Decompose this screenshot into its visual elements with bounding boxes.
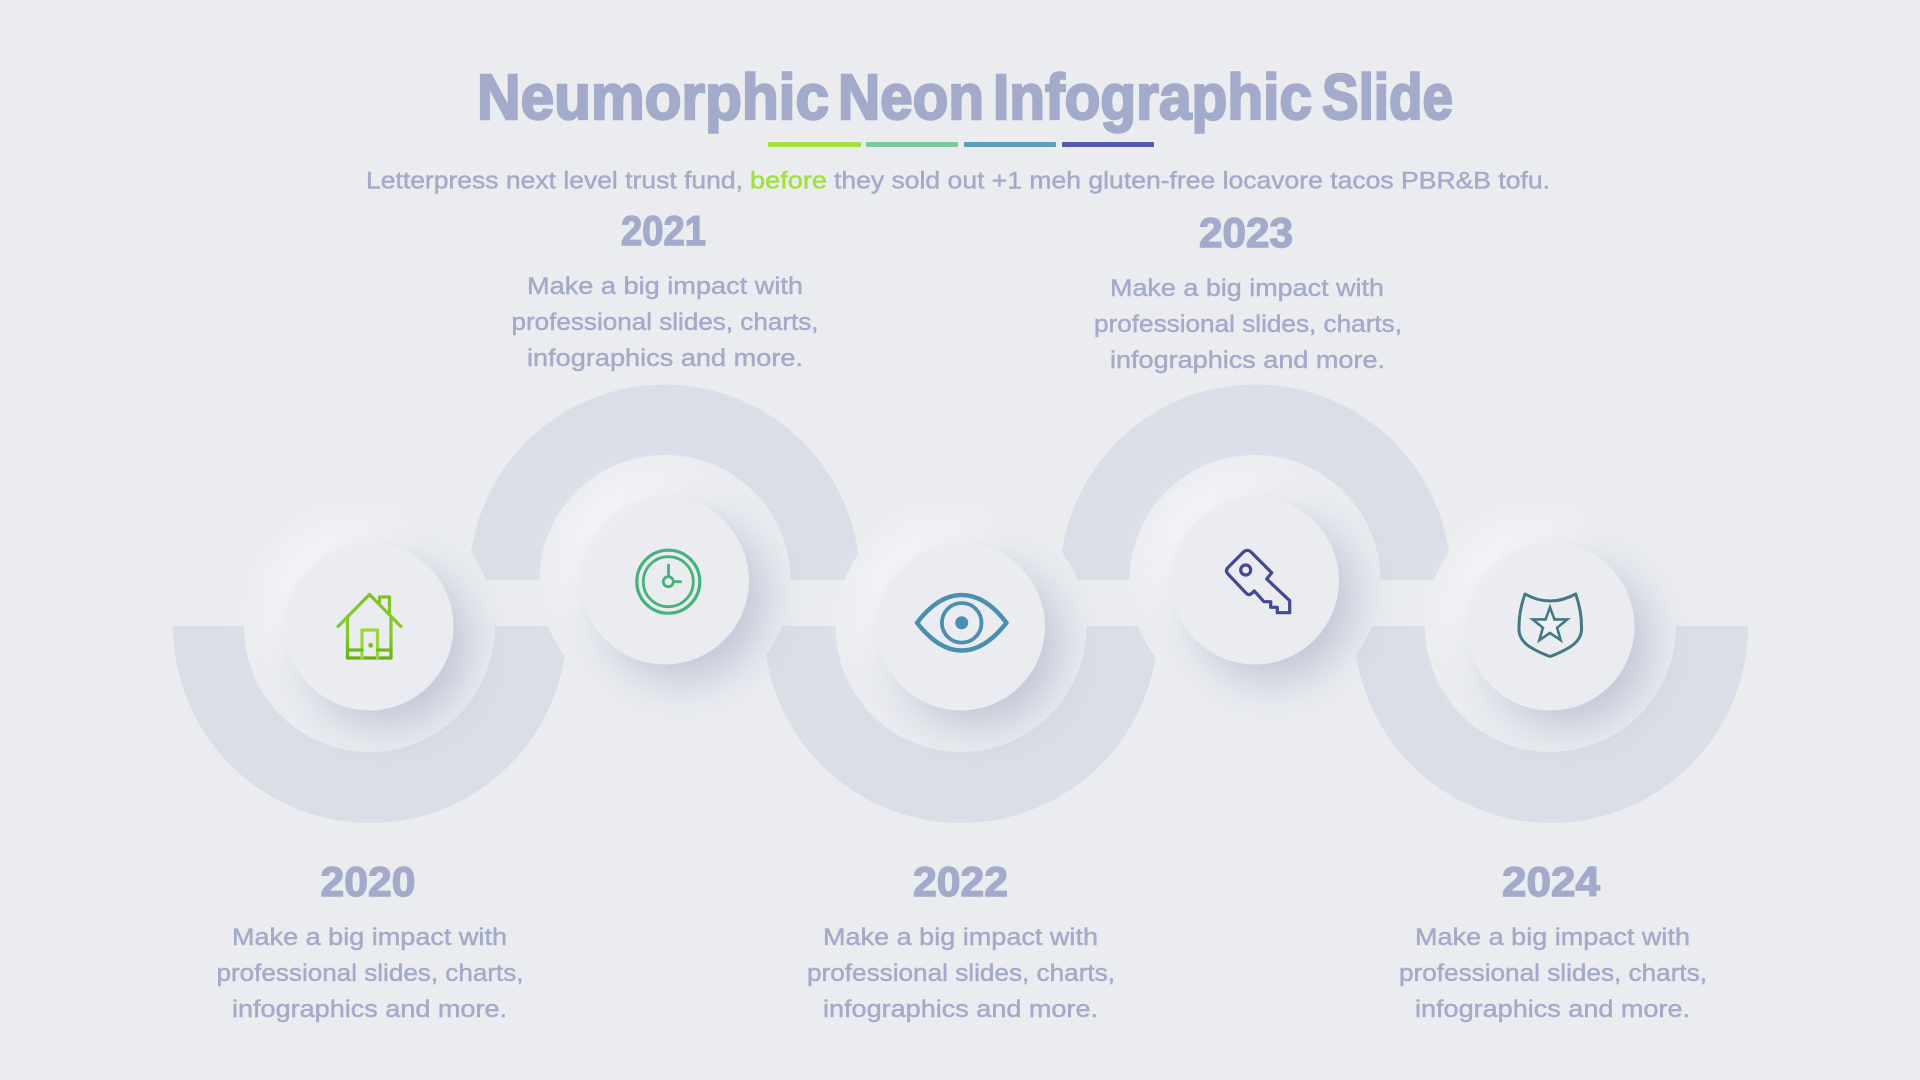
- text block 2023: professional slides, charts,: [1094, 311, 1402, 338]
- subtitle: they sold out +1 meh gluten-free locavore tacos PBR&B tofu.: [834, 168, 1550, 194]
- text block 2022: 2022: [913, 858, 1008, 905]
- text block 2020: [216, 858, 524, 1023]
- node 2021: clock icon: [567, 482, 765, 680]
- title: Slide: [1322, 61, 1453, 133]
- text block 2022: Make a big impact with: [823, 924, 1098, 951]
- text block 2024: [1399, 858, 1707, 1023]
- text block 2022: [807, 858, 1115, 1023]
- text block 2020: infographics and more.: [232, 996, 507, 1023]
- text block 2021: professional slides, charts,: [512, 309, 818, 336]
- half-ring arcs behind the timeline: [173, 384, 1748, 823]
- icon: shield with star: [1519, 594, 1582, 656]
- text block 2022: infographics and more.: [823, 996, 1098, 1023]
- text block 2021: 2021: [621, 207, 706, 254]
- node 2024: shield icon: [1452, 528, 1650, 726]
- text block 2024: 2024: [1502, 858, 1601, 905]
- text block 2024: infographics and more.: [1415, 996, 1690, 1023]
- subtitle: Letterpress next level trust fund,: [366, 168, 743, 194]
- text block 2020: professional slides, charts,: [216, 960, 524, 987]
- outer wells of the timeline nodes: [244, 455, 1676, 752]
- title: Neon: [838, 61, 984, 133]
- icon: eye: [917, 595, 1006, 650]
- text block 2024: professional slides, charts,: [1399, 960, 1707, 987]
- node 2020: house icon: [272, 528, 470, 726]
- text block 2024: Make a big impact with: [1415, 924, 1690, 951]
- icon: clock: [637, 550, 700, 613]
- text block 2022: professional slides, charts,: [807, 960, 1115, 987]
- icon: house: [338, 594, 401, 658]
- node 2023: key icon: [1157, 482, 1355, 680]
- text block 2021: Make a big impact with: [527, 273, 803, 300]
- text block 2023: 2023: [1199, 209, 1293, 256]
- title underline: four colour bars: [768, 142, 1154, 147]
- icon: key: [1226, 550, 1290, 613]
- title: Neumorphic: [477, 61, 829, 133]
- text block 2020: 2020: [320, 858, 416, 905]
- text block 2023: Make a big impact with: [1110, 275, 1384, 302]
- subtitle: before: [750, 168, 827, 194]
- text block 2021: infographics and more.: [527, 345, 803, 372]
- text block 2021: [512, 207, 818, 372]
- title: Infographic: [993, 61, 1312, 133]
- text block 2023: infographics and more.: [1110, 347, 1385, 374]
- text block 2023: [1094, 209, 1402, 374]
- text block 2020: Make a big impact with: [232, 924, 507, 951]
- node 2022: eye icon: [863, 528, 1061, 726]
